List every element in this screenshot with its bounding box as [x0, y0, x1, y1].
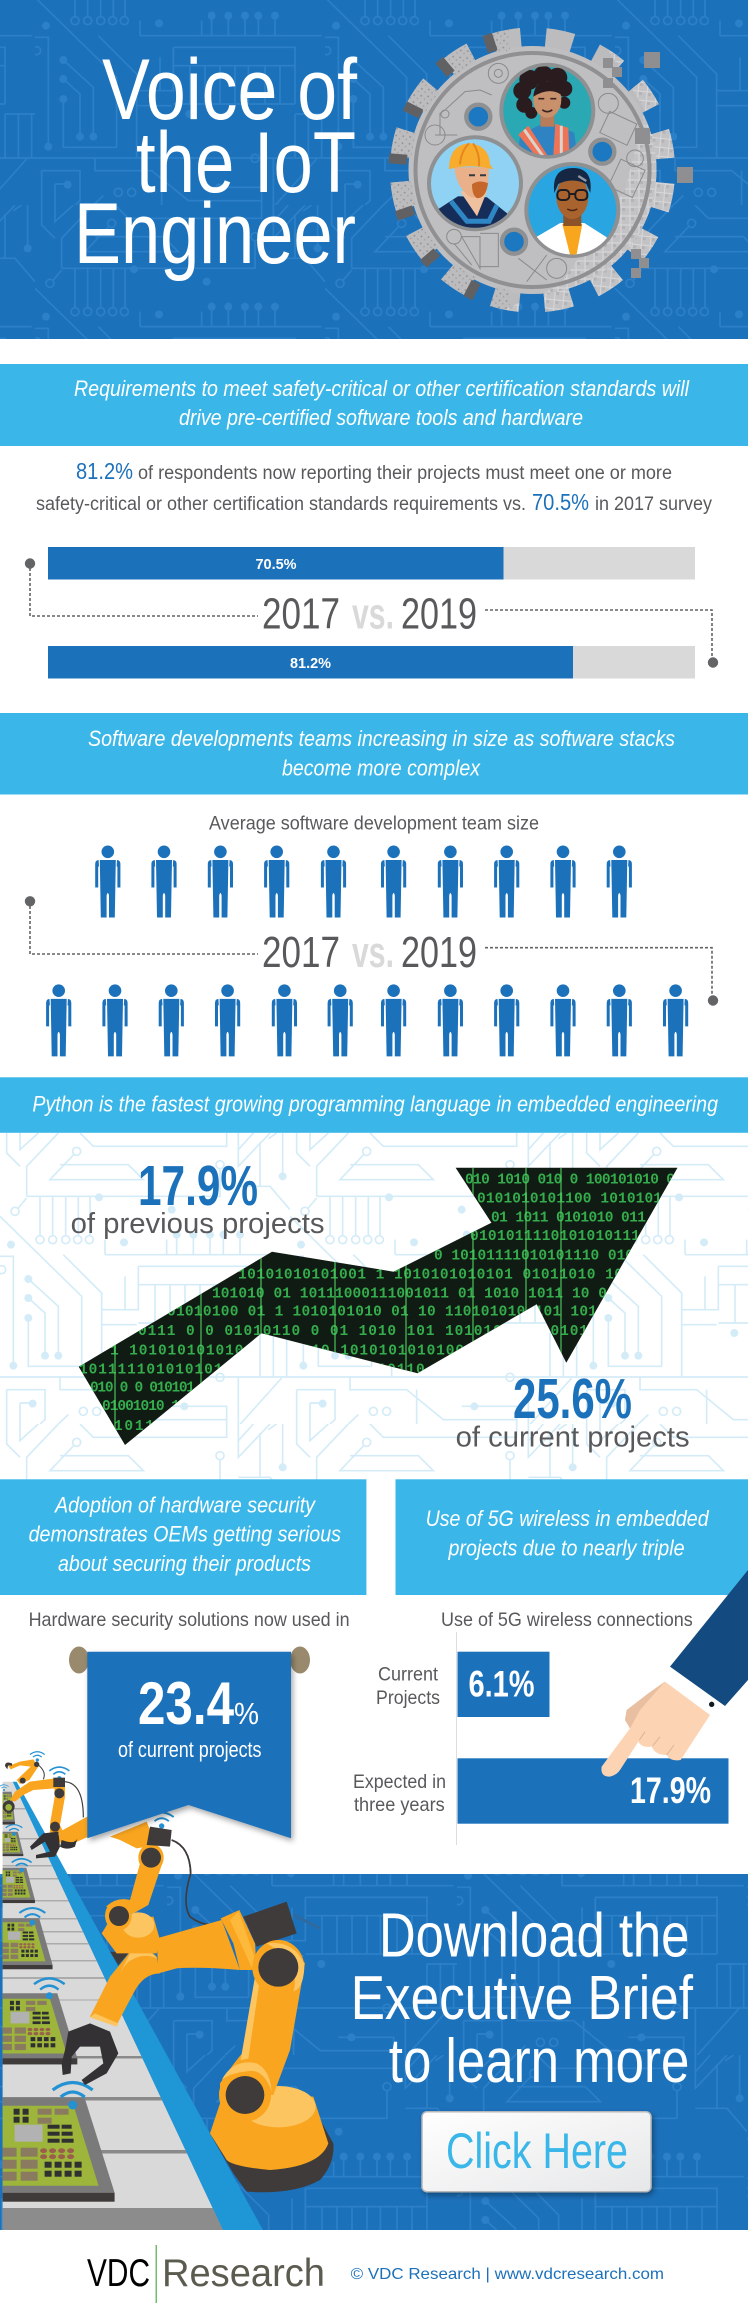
- heading: certification requirements: drive pre-certified software tools and hardware: [179, 405, 583, 430]
- arrow: binary code growth arrow: 010 1010 010 0 100101010 0: [465, 1172, 675, 1188]
- icon: pointing hand with sleeve: [601, 1570, 748, 1777]
- comparison label team: 2019: [401, 928, 477, 977]
- portrait: scientist with glasses: [526, 164, 618, 256]
- banner: hardware security statistic: 23.4: [138, 1670, 235, 1737]
- bar: 2019: 81.2%: [290, 655, 331, 672]
- heading: download call to action: [351, 1902, 694, 2096]
- arrow: binary code growth arrow: 1 1010101010101 01 1010 1010101010100101 0 11 1: [110, 1343, 560, 1359]
- robot: large arm: [62, 1840, 333, 2192]
- arrow: binary code growth arrow: 01 1011 0101010 011: [491, 1211, 646, 1227]
- button: click here: Click Here: [446, 2123, 628, 2179]
- stat: current projects: 25.6%: [513, 1367, 632, 1431]
- bar: 2017: [48, 547, 695, 580]
- arrow: binary code growth arrow: 0111 0 0 01010110 0 01 1010 101 101010 11 10101: [138, 1324, 588, 1340]
- icon row: 2017 team of ten: [95, 846, 632, 918]
- arrow: binary code growth arrow: 0101010101100 1010101: [477, 1192, 662, 1208]
- robot: small near arm: [3, 1778, 88, 1858]
- category labels: three years: [354, 1794, 445, 1816]
- bar: current: [458, 1652, 550, 1717]
- title: [74, 42, 358, 282]
- arrow: binary code growth arrow: 10111110101010110 1 0101 0101 110110 1: [79, 1362, 444, 1378]
- stat: current projects: of current projects: [456, 1422, 690, 1454]
- category labels: [353, 1664, 446, 1816]
- stat: previous projects: [71, 1154, 325, 1240]
- heading: 5G wireless: Use of 5G wireless in embedded: [426, 1506, 709, 1531]
- arrow: binary code growth arrow: [79, 1167, 677, 1447]
- category labels: Current: [378, 1664, 439, 1686]
- stat: previous projects: of previous projects: [71, 1208, 325, 1240]
- icon: gear with three engineer portraits: [388, 26, 693, 314]
- heading: download call to action: Download the: [379, 1902, 689, 1971]
- robot: small far arm: [5, 1759, 44, 1784]
- text block: hardware security caption: Hardware security solutions now used in: [29, 1609, 350, 1631]
- arrow: binary code growth arrow: 0101011110101010111: [470, 1229, 640, 1245]
- arrow: binary code growth arrow: 01010100 01 1 1010101010 01 10 110101010 101 101: [167, 1305, 597, 1321]
- text block: certification statistic: 81.2%: [76, 458, 133, 484]
- stat: current projects: [456, 1367, 690, 1454]
- arrow: binary code growth arrow: 010 0 0 010101: [90, 1381, 195, 1397]
- heading: certification requirements: [0, 364, 748, 446]
- connector: left dashed team: [25, 896, 258, 954]
- comparison label team: [262, 928, 477, 977]
- bar chart: 5G wireless: [353, 1632, 728, 1845]
- bar chart: certification 2017 vs 2019: [25, 547, 718, 678]
- panel: python growth: [0, 1133, 748, 1480]
- text block: copyright: © VDC Research | www.vdcresearch.com: [351, 2266, 664, 2283]
- text block: certification statistic: safety-critical or other certification standards requirements vs.: [36, 494, 526, 515]
- robot: rear arm behind banner: [102, 1822, 191, 1953]
- banner: hardware security statistic: %: [234, 1696, 259, 1731]
- heading: team size: [0, 713, 748, 794]
- portrait: woman with safety vest: [501, 65, 593, 157]
- comparison label: 2017: [262, 590, 340, 638]
- heading: hardware security: Adoption of hardware security: [53, 1493, 317, 1518]
- heading: download call to action: to learn more: [389, 2027, 689, 2096]
- arrow: binary code growth arrow: 1011: [114, 1419, 154, 1435]
- comparison label team: 2017: [262, 928, 340, 977]
- logo: VDC Research: VDC: [87, 2252, 150, 2295]
- panel: call to action background: [0, 1874, 748, 2230]
- arrow: binary code growth arrow: 101010 01 10111000111001011 01 1010 1011 10 0: [212, 1286, 607, 1302]
- knobs: [69, 1646, 310, 1674]
- title: Voice of: [102, 42, 358, 138]
- icon row: 2019 team of twelve: [46, 984, 688, 1056]
- heading: 5G wireless: projects due to nearly triple: [448, 1536, 684, 1561]
- stat: previous projects: 17.9%: [138, 1154, 258, 1218]
- portrait: builder with hard hat: [429, 137, 521, 229]
- logo: VDC Research: Research: [162, 2252, 325, 2295]
- text block: certification statistic: in 2017 survey: [595, 494, 712, 515]
- icon: wifi signals on chips: [0, 1752, 174, 2109]
- heading: python: [0, 1077, 748, 1133]
- comparison label: 2019: [401, 590, 477, 638]
- bar: current: 6.1%: [468, 1664, 534, 1705]
- title: the IoT: [136, 115, 356, 211]
- heading: certification requirements: Requirements to meet safety-critical or other certification standards will: [74, 376, 690, 401]
- connector: right dashed team: [485, 948, 718, 1006]
- connector: left dashed: [25, 558, 258, 616]
- comparison label team: vs.: [352, 928, 394, 977]
- heading: hardware security: demonstrates OEMs getting serious: [29, 1522, 341, 1547]
- heading: hardware security: [0, 1479, 366, 1595]
- bar: 2019: [48, 646, 695, 678]
- banner: hardware security statistic: [69, 1646, 310, 1838]
- bar: expected: [458, 1758, 728, 1824]
- heading: hardware security: about securing their products: [58, 1551, 311, 1576]
- text block: certification statistic: [36, 458, 712, 515]
- heading: team size: become more complex: [282, 756, 481, 780]
- arrow: binary code growth arrow: 10101010101001 1 1010101010101 01011010 10: [238, 1267, 623, 1283]
- arrow: binary code growth arrow: 01001010 1: [102, 1399, 180, 1415]
- text block: 5G caption: Use of 5G wireless connections: [441, 1609, 693, 1631]
- banner: hardware security statistic: of current projects: [118, 1737, 262, 1762]
- comparison label: [262, 590, 477, 638]
- bar: 2017: 70.5%: [256, 556, 296, 573]
- heading: 5G wireless: [396, 1479, 748, 1595]
- text block: certification statistic: 70.5%: [532, 489, 589, 515]
- text block: team size caption: Average software development team size: [209, 812, 539, 834]
- title: Engineer: [74, 186, 356, 282]
- comparison label: vs.: [352, 590, 394, 638]
- panel: header: [0, 0, 748, 339]
- illustration: robot arms: [0, 1752, 333, 2192]
- bar: expected: 17.9%: [630, 1770, 711, 1811]
- button: click here: [422, 2112, 651, 2192]
- illustration: conveyor belt with chips: [0, 1782, 263, 2230]
- text block: certification statistic: of respondents now reporting their projects must meet one or more: [138, 463, 672, 484]
- logo: VDC Research: [87, 2245, 325, 2303]
- heading: team size: Software developments teams increasing in size as software stacks: [88, 726, 675, 751]
- category labels: Expected in: [353, 1771, 446, 1793]
- category labels: Projects: [376, 1687, 440, 1709]
- connector: right dashed: [485, 610, 718, 668]
- arrow: binary code growth arrow: 0 10101111010101110 010: [434, 1248, 634, 1264]
